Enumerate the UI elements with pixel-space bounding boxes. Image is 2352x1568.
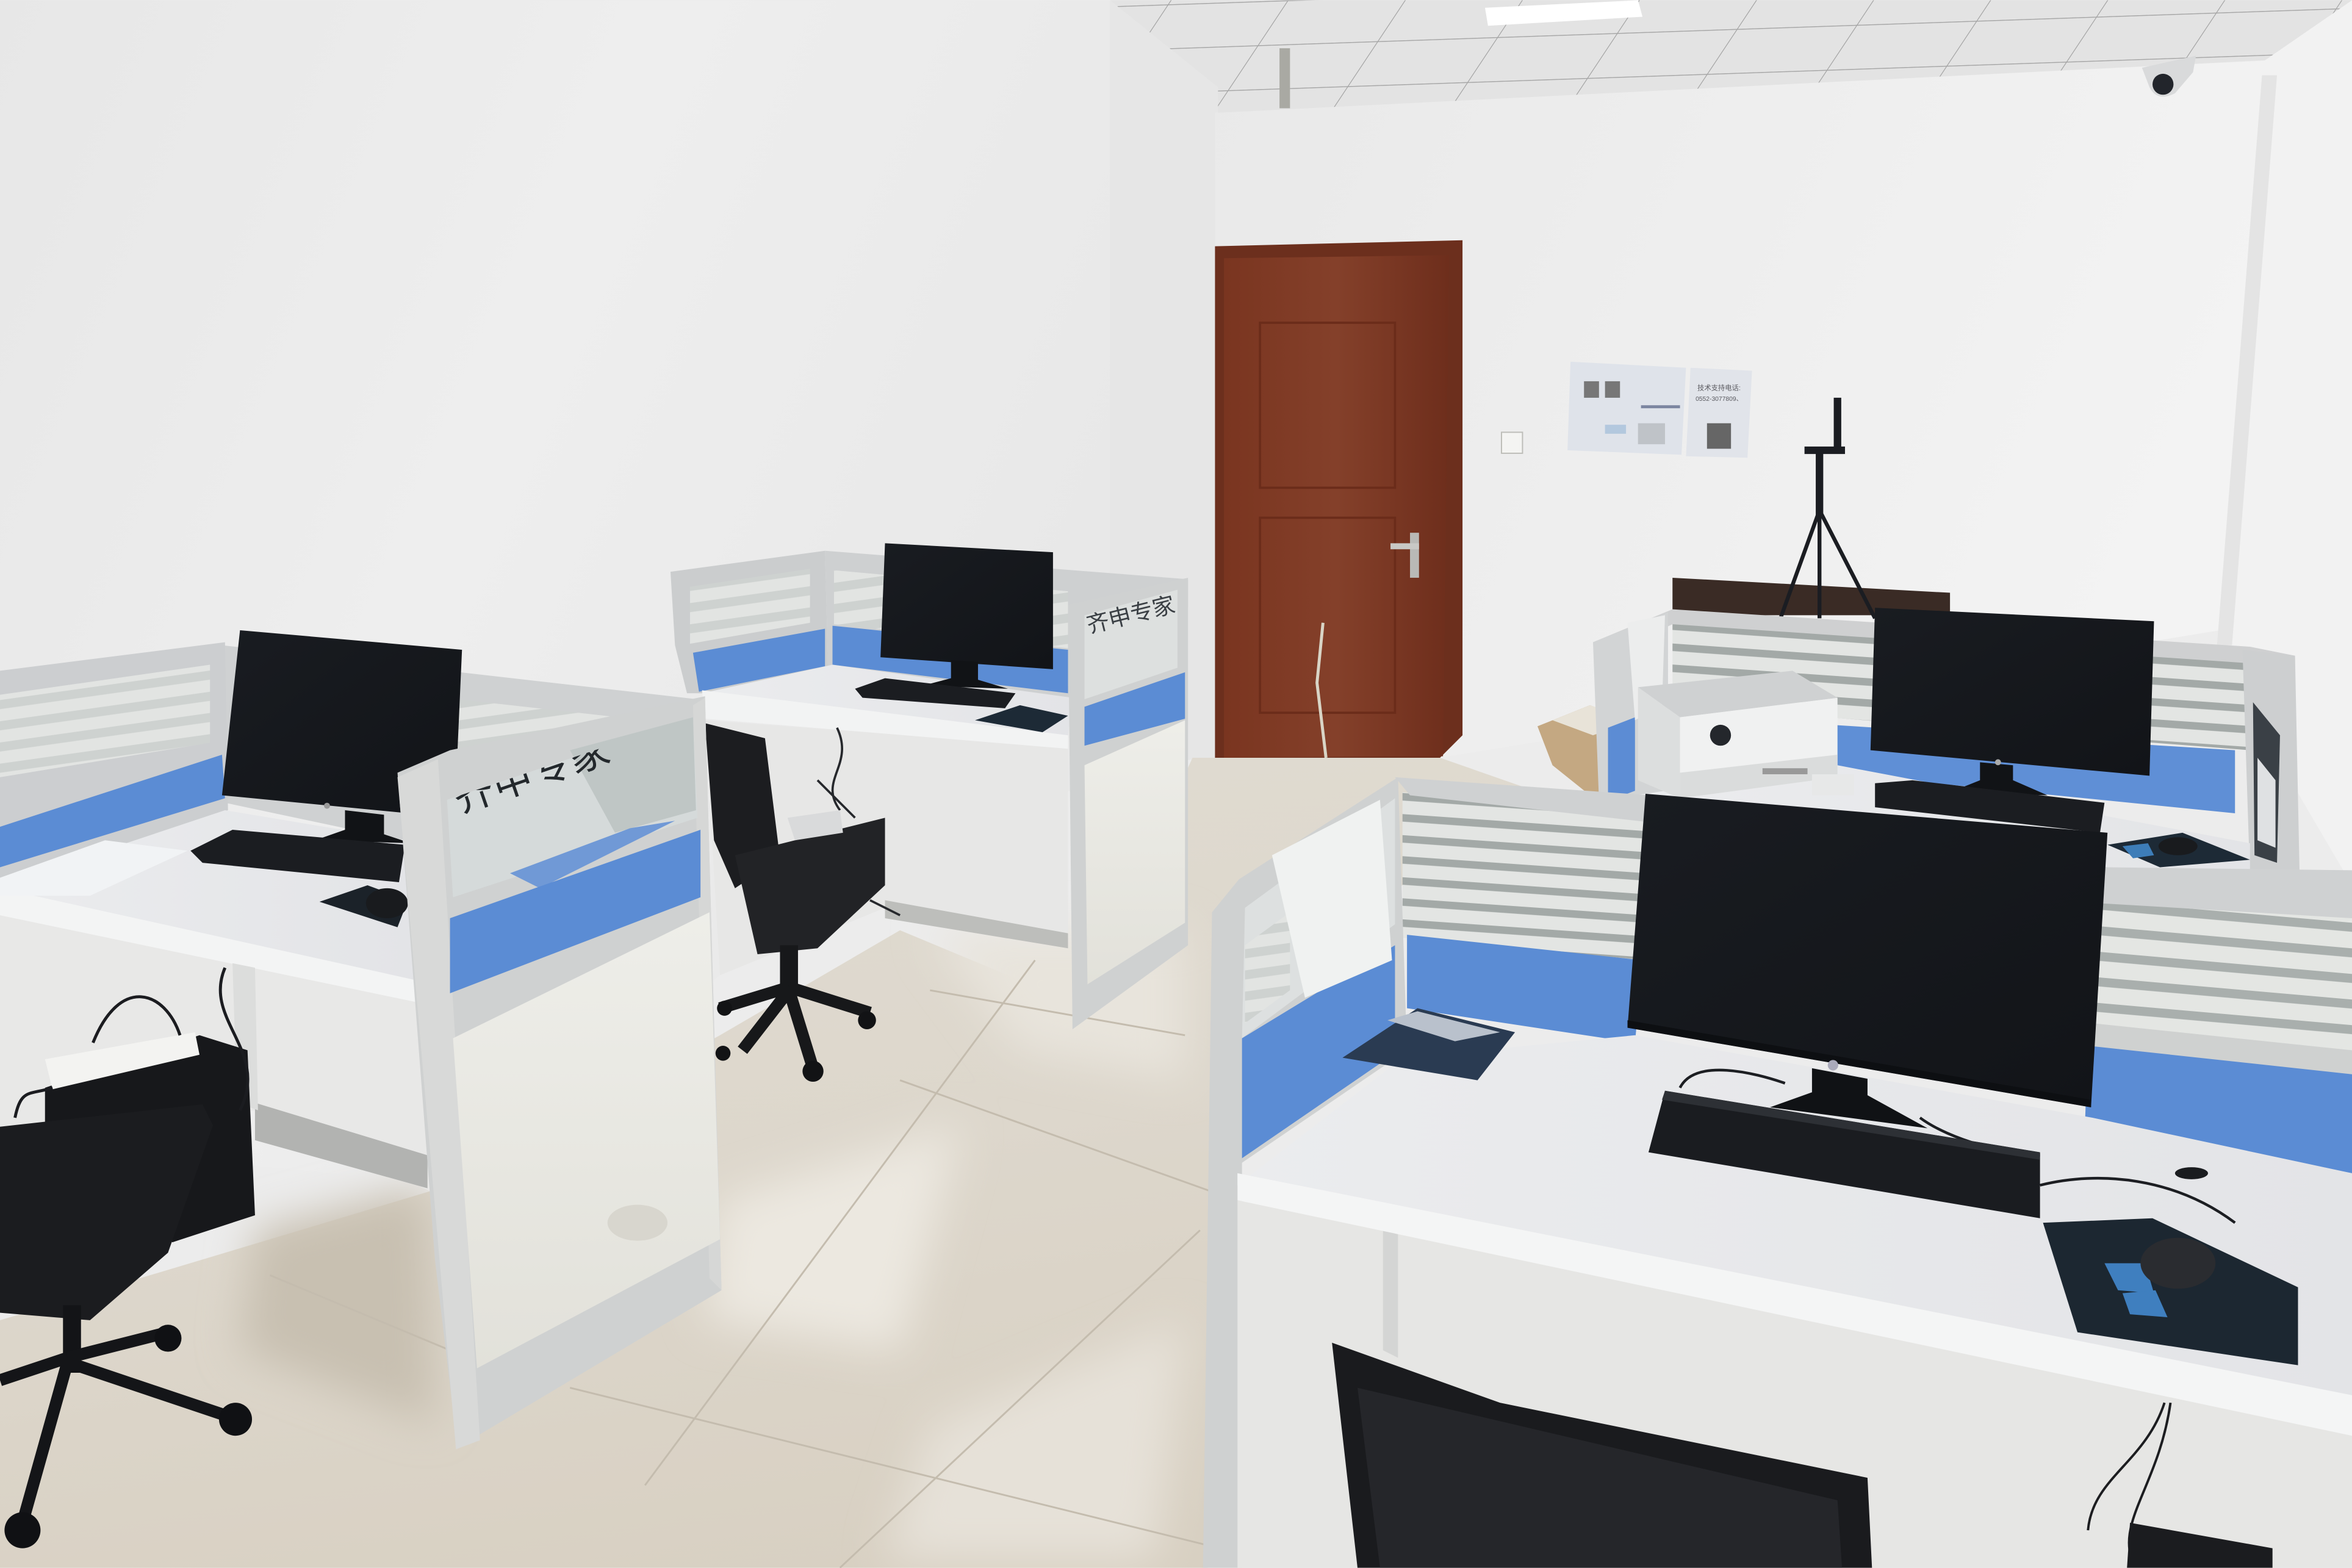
monitor (1628, 794, 2107, 1128)
blue band (0, 755, 225, 867)
wall pillar (1110, 0, 1218, 765)
end screen (398, 696, 722, 1449)
decal cut off by frame: 齐申专家 (447, 727, 615, 822)
blue band left (1407, 935, 1642, 1043)
back right window (2093, 885, 2352, 1081)
door (1215, 240, 1462, 758)
dark furniture behind cubicle (1672, 578, 1950, 615)
back screen window (1672, 618, 2250, 750)
desk top (1635, 765, 2250, 885)
post (398, 759, 480, 1449)
right wall (2220, 0, 2352, 885)
lower white panel (453, 912, 720, 1368)
printer (1638, 671, 1838, 798)
cables on desk (1680, 1070, 2235, 1223)
power strip (45, 1032, 200, 1089)
floor reflections (240, 930, 1185, 1560)
monitor (880, 543, 1053, 689)
floor tile lines (270, 960, 1215, 1568)
mouse pad (2043, 1218, 2298, 1365)
floor cables (2088, 1403, 2171, 1553)
security camera (2142, 56, 2196, 96)
mouse pad (975, 705, 1068, 732)
lower right frame (2088, 1023, 2352, 1077)
desk leg (1383, 1223, 1398, 1358)
desk leg (232, 963, 258, 1110)
cardboard box (1537, 705, 1638, 795)
small white device (1812, 774, 1854, 795)
paper on desk (0, 840, 187, 896)
back left screen (671, 551, 828, 693)
monitor (1871, 608, 2154, 795)
panel: back right cubicle (1593, 608, 2300, 885)
left side screen (1203, 777, 1407, 1568)
baseboard (255, 1102, 428, 1189)
panel: middle cubicle (671, 543, 1188, 1082)
right end screen (2243, 650, 2300, 878)
keyboard (855, 678, 1015, 708)
floor (0, 758, 1590, 1568)
left back screen (0, 642, 228, 888)
blue band right (2085, 1046, 2352, 1173)
desk top (0, 810, 414, 984)
light switch (1501, 432, 1522, 453)
lower room area under desk (1237, 1200, 2352, 1568)
ceiling light (1485, 0, 1642, 26)
frame (398, 696, 722, 1448)
desk front edge (702, 690, 1068, 749)
ceiling (1110, 0, 2352, 113)
desk top (1237, 1035, 2352, 1395)
back wall (1215, 60, 2273, 758)
small dongle (2175, 1167, 2208, 1179)
wall notices (1567, 362, 1752, 458)
sprinkler pipe (1279, 48, 1290, 108)
desk front edge (1237, 1173, 2352, 1436)
hanging paper (1272, 800, 1392, 998)
tripod (1780, 398, 1875, 618)
mouse pad (2107, 833, 2250, 867)
PC under desk (2127, 1523, 2273, 1568)
panel: left cubicle (0, 630, 722, 1548)
desk front edge (0, 888, 417, 1002)
wall under desk (0, 901, 450, 1200)
screen top frame (1593, 610, 2295, 669)
desk top (702, 665, 1073, 735)
side screen (1593, 612, 1668, 801)
cables under desk (818, 728, 900, 915)
office chair (0, 1104, 252, 1548)
mouse pad (320, 885, 408, 927)
office chair back (1332, 1343, 1872, 1568)
left wall (0, 0, 1118, 1185)
scuff marks (608, 1205, 667, 1241)
keyboard (1649, 1091, 2040, 1218)
frosted window (447, 717, 697, 897)
door handle (1390, 533, 1419, 578)
top frame (1395, 777, 2352, 918)
panel: front right cubicle (1203, 777, 2352, 1568)
PC tower (45, 1035, 255, 1242)
back blue band (1830, 725, 2235, 813)
cables (15, 968, 248, 1118)
office chair (705, 723, 885, 1082)
baseboard (885, 901, 1068, 948)
keyboard (1875, 780, 2104, 833)
keyboard (190, 830, 405, 882)
back left window (1403, 793, 1647, 960)
brochures (1342, 1009, 1515, 1081)
end screen (1068, 578, 1188, 1029)
monitor (222, 630, 462, 843)
right back screen (222, 646, 697, 840)
support phone notice: 技术支持电话: (1697, 384, 1741, 392)
blue band (450, 830, 700, 993)
wall notices: 0552-3077809、 (1696, 396, 1742, 403)
back right screen (825, 551, 1188, 705)
mouse (2140, 1238, 2215, 1289)
wall under desk (705, 721, 1068, 975)
frosted decal: 齐申专家 (1084, 592, 1178, 638)
wall conduit right (2217, 75, 2277, 646)
